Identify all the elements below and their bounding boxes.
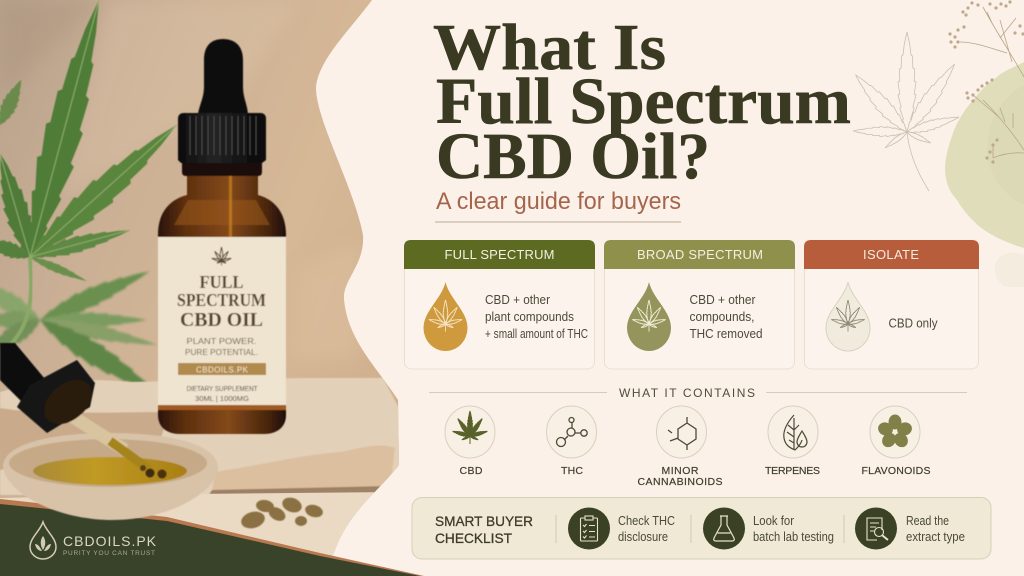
- checklist heading: [435, 513, 533, 546]
- bottle label: [158, 237, 286, 405]
- amber dropper bottle: [158, 39, 286, 434]
- item: batch lab testing: batch lab testing: [753, 530, 834, 544]
- bottle label: FULL: [200, 272, 244, 292]
- bottle label: PURE POTENTIAL.: [185, 348, 258, 357]
- contains: THC: [546, 406, 596, 477]
- sand surface below stone: [0, 492, 374, 556]
- checklist heading: SMART BUYER: [435, 513, 533, 529]
- bottle body: [158, 163, 286, 434]
- bottle label: DIETARY SUPPLEMENT: [186, 386, 258, 393]
- footer band with logo: [0, 499, 424, 576]
- decorative green wash blob and botanical sprigs: [945, 0, 1024, 287]
- description: [690, 293, 763, 341]
- item: read the extract type: extract type: [906, 530, 965, 544]
- description: plant compounds: [485, 310, 574, 324]
- item: batch lab testing: Look for: [753, 514, 794, 528]
- contains: flavonoids: FLAVONOIDS: [862, 465, 930, 477]
- contains: minor cannabinoids: MINOR: [662, 465, 699, 477]
- rubber bulb: [198, 39, 248, 114]
- outline cannabis leaf decoration: [850, 32, 961, 191]
- bottle label: SPECTRUM: [177, 290, 266, 310]
- pipette dropper: [0, 343, 166, 478]
- contains: THC: THC: [561, 465, 583, 477]
- item: read the extract type: Read the: [906, 514, 949, 528]
- photo: CBD oil bottle scene: [0, 0, 420, 576]
- checklist heading: CHECKLIST: [435, 530, 512, 546]
- panel: smart buyer checklist: [412, 498, 991, 559]
- panel: broad spectrum: [604, 240, 795, 369]
- bottle label: PLANT POWER.: [186, 337, 256, 346]
- bottle label: 30ML | 1000MG: [195, 396, 249, 403]
- description: [485, 293, 588, 341]
- contains: CBD: CBD: [460, 465, 483, 477]
- photo wall backdrop: [0, 0, 420, 576]
- icon: pale drop: [826, 282, 870, 351]
- description: CBD only: [888, 316, 938, 330]
- logo drop: [30, 522, 56, 559]
- title: CBD Oil?: [436, 120, 710, 193]
- item: check THC disclosure: disclosure: [618, 530, 668, 544]
- contains: CBD: [445, 406, 495, 477]
- panel: full spectrum: FULL SPECTRUM: [444, 247, 554, 262]
- bottle label: CBDOILS.PK: [196, 366, 249, 374]
- panel: isolate: ISOLATE: [863, 247, 919, 262]
- description: + small amount of THC: [485, 327, 588, 341]
- title: [433, 11, 851, 193]
- item: read the extract type: [855, 508, 965, 550]
- contains: minor cannabinoids: [638, 406, 722, 488]
- icon: olive drop: [627, 282, 671, 351]
- item: check THC disclosure: Check THC: [618, 514, 675, 528]
- stone slab: [0, 378, 400, 496]
- contains: minor cannabinoids: CANNABINOIDS: [638, 476, 722, 488]
- item: batch lab testing: [703, 508, 834, 550]
- logo tagline: PURITY YOU CAN TRUST: [63, 550, 155, 557]
- title: Full Spectrum: [436, 65, 851, 138]
- subtitle: A clear guide for buyers: [436, 188, 681, 215]
- seeds: [240, 497, 324, 529]
- section heading: what it contains: WHAT IT CONTAINS: [619, 386, 755, 400]
- photo: cannabis plant: [0, 0, 186, 403]
- icon: amber drop: [424, 282, 468, 351]
- description: CBD + other: [485, 293, 550, 307]
- contains: terpenes: TERPENES: [765, 465, 820, 477]
- ribbed black cap: [178, 113, 266, 163]
- bottle label: CBD OIL: [180, 309, 263, 331]
- item: check THC disclosure: [568, 508, 675, 550]
- panel: isolate: [804, 240, 979, 369]
- ceramic bowl with oil: [3, 433, 218, 520]
- label leaf icon: [212, 247, 231, 265]
- panel: full spectrum: [404, 240, 595, 369]
- contains: flavonoids: [862, 406, 930, 477]
- contains: terpenes: [765, 406, 820, 477]
- neck collar and amber highlights: [182, 163, 262, 176]
- title: What Is: [433, 11, 666, 84]
- description: compounds,: [690, 310, 754, 324]
- description: THC removed: [690, 327, 763, 341]
- description: CBD + other: [690, 293, 756, 307]
- logo wordmark: CBDOILS.PK: [63, 533, 157, 549]
- panel: broad spectrum: BROAD SPECTRUM: [637, 247, 763, 262]
